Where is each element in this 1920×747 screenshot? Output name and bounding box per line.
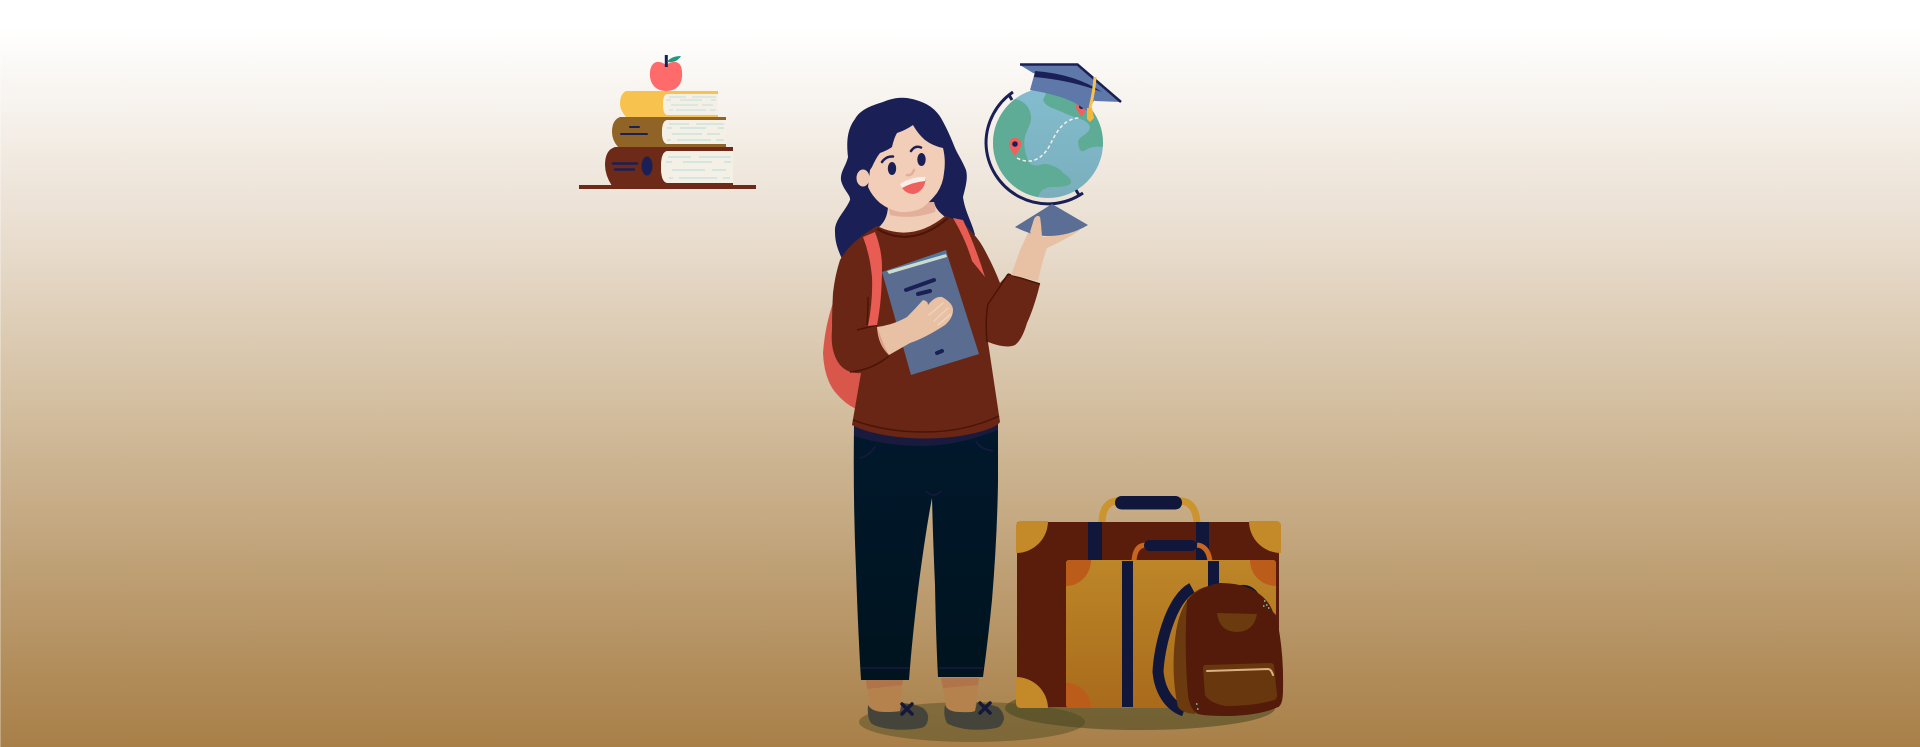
neck shadow <box>888 202 935 217</box>
globe <box>984 90 1103 237</box>
large suitcase <box>1016 496 1281 708</box>
eyebrows <box>882 147 921 162</box>
cap outline <box>1020 64 1121 102</box>
globe stand <box>1015 204 1088 236</box>
cap skull <box>1030 72 1100 111</box>
tassel <box>1090 77 1095 108</box>
backpack top pocket <box>1217 613 1257 632</box>
thumb <box>1030 216 1042 245</box>
ear <box>856 170 870 186</box>
shoes <box>868 703 1004 730</box>
shelf <box>579 185 756 189</box>
mouth <box>901 177 926 194</box>
suitcase straps <box>1088 522 1209 562</box>
map pin left <box>1009 138 1021 156</box>
legs <box>866 678 979 712</box>
backpack stitches <box>1196 601 1270 709</box>
globe sphere <box>993 88 1103 198</box>
backpack straps on shoulders <box>863 218 985 326</box>
suitcase body <box>1017 522 1279 707</box>
backpack behind body <box>823 300 880 409</box>
top book <box>620 91 718 117</box>
nose <box>907 170 914 175</box>
sweater collar line <box>877 218 948 237</box>
neck <box>875 202 950 243</box>
map pin right <box>1076 102 1087 117</box>
shoe laces <box>902 703 990 714</box>
globe continents <box>993 93 1103 198</box>
pants <box>854 424 998 680</box>
ground shadows <box>859 686 1275 742</box>
small suitcase straps <box>1122 561 1219 707</box>
small suitcase handle <box>1134 545 1210 561</box>
sweater <box>832 216 1040 438</box>
backpack <box>1158 583 1283 716</box>
flight route <box>1017 118 1080 161</box>
cap dark band <box>1034 71 1102 92</box>
graduation cap <box>1020 64 1121 122</box>
sweater hem line <box>853 416 999 432</box>
student figure <box>823 98 1080 730</box>
forearm and hand on book <box>877 297 953 355</box>
backpack front pocket <box>1203 663 1277 706</box>
hair back <box>835 98 975 268</box>
backpack main <box>1186 583 1283 716</box>
backpack side panel <box>1174 587 1215 714</box>
small suitcase <box>1066 540 1276 708</box>
small suitcase body <box>1066 560 1276 708</box>
backpack strap <box>1158 588 1192 711</box>
suitcase corners <box>1016 521 1281 708</box>
sweater fold lines <box>850 274 1040 372</box>
bottom book <box>605 147 733 186</box>
book held <box>882 250 979 375</box>
eyes <box>888 162 896 175</box>
book stack with apple <box>579 55 756 189</box>
cap board <box>1020 64 1121 102</box>
globe meridian arc <box>986 92 1083 204</box>
face <box>856 125 945 212</box>
suitcase handle <box>1102 501 1197 522</box>
raised forearm and hand <box>1011 228 1080 281</box>
small suitcase corners <box>1066 560 1276 708</box>
apple <box>650 55 682 91</box>
middle book <box>612 117 726 147</box>
